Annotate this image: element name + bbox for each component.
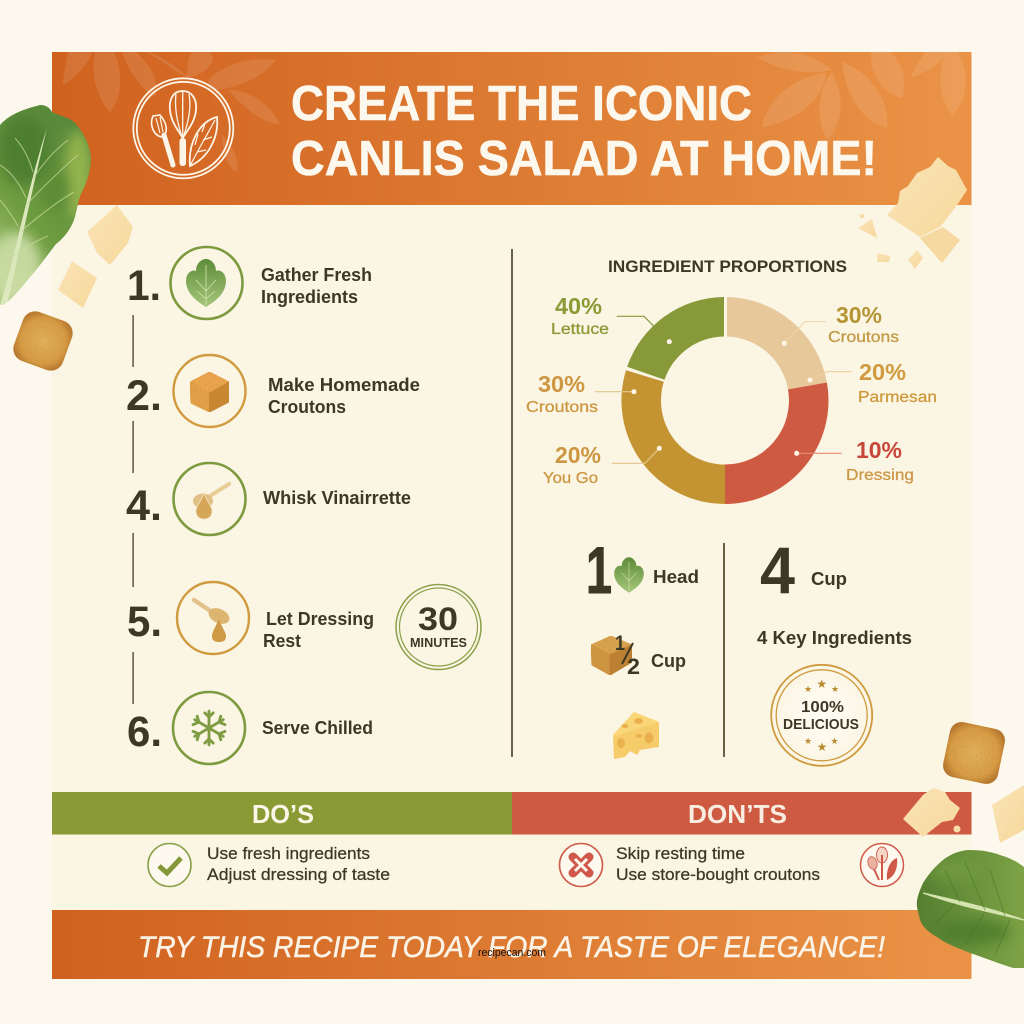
label: 20% you go: You Go [543, 470, 598, 487]
illustration: parmesan pieces left [58, 205, 133, 308]
label: 40% lettuce: 40% [555, 293, 602, 319]
text: do's list [207, 845, 390, 884]
illustration: parmesan top right [858, 157, 967, 269]
stat: 4 cup [760, 533, 847, 607]
badge: 100% delicious: DELICIOUS [783, 716, 859, 733]
label: 30% croutons left: 30% [538, 371, 585, 397]
title: CREATE THE ICONIC [291, 77, 752, 131]
step 4: let dressing rest [127, 582, 374, 654]
icon: whisk, fork and leaf emblem [133, 78, 233, 178]
heading: ingredient proportions: INGREDIENT PROPORTIONS [608, 257, 847, 276]
badge: 30 minutes [396, 584, 481, 670]
vertical divider: stats [723, 543, 725, 757]
title: CANLIS SALAD AT HOME! [291, 132, 877, 186]
step 5: serve chilled [127, 692, 373, 764]
label: 40% lettuce [551, 293, 609, 338]
text: don'ts list: Use store-bought croutons [616, 866, 820, 884]
badge: 100% delicious: ★ [816, 677, 827, 691]
illustration: parmesan bottom right [903, 785, 1024, 843]
stat: 1/2 cup: 1 [615, 632, 625, 655]
label: 20% you go [543, 442, 601, 487]
step 4: let dressing rest: Let Dressing [266, 609, 374, 629]
title [291, 77, 877, 186]
step 5: serve chilled: Serve Chilled [262, 718, 373, 738]
label: 20% parmesan: Parmesan [858, 389, 937, 406]
label: 30% croutons right: 30% [836, 302, 882, 328]
label: 20% parmesan [858, 359, 937, 406]
text: 4 key ingredients: 4 Key Ingredients [757, 628, 912, 648]
label: 20% you go: 20% [555, 442, 601, 468]
badge: 100% delicious: ★ [830, 736, 839, 746]
panel: content card [52, 205, 972, 910]
panel: do's header [52, 792, 512, 834]
panel: don'ts header: DON’TS [688, 799, 787, 829]
illustration: romaine leaf top left [0, 105, 92, 305]
illustration: crouton right [941, 720, 1007, 786]
icon: x mark [560, 844, 602, 886]
illustration: crouton left [10, 308, 76, 374]
label: 20% parmesan: 20% [859, 359, 906, 385]
step 1: gather fresh ingredients: Gather Fresh [261, 265, 372, 285]
icon: check mark [148, 844, 191, 886]
text: don'ts list [616, 845, 820, 884]
step 3: whisk vinaigrette [126, 463, 411, 535]
badge: 100% delicious: ★ [804, 684, 812, 694]
step 4: let dressing rest: 5. [127, 598, 162, 646]
text: do's list: Use fresh ingredients [207, 845, 370, 863]
label: 10% dressing: 10% [856, 437, 902, 463]
step 3: whisk vinaigrette: Whisk Vinairrette [263, 488, 411, 508]
text: don'ts list: Skip resting time [616, 845, 745, 863]
badge: 100% delicious [771, 665, 872, 766]
footer banner: TRY THIS RECIPE TODAY FOR A TASTE OF ELEGANCE! [138, 931, 886, 964]
label: 30% croutons left [526, 371, 598, 416]
stat: 1 head [586, 533, 699, 607]
stat: 1 head: Head [653, 567, 699, 587]
panel: don'ts header [512, 792, 972, 834]
label: 10% dressing [846, 437, 914, 484]
stat: 1/2 cup: Cup [651, 651, 686, 671]
icon: red utensils [860, 844, 904, 886]
step 1: gather fresh ingredients [127, 247, 372, 319]
step connector lines [132, 315, 134, 704]
icon: cheese wedge [613, 712, 659, 759]
step 2: make homemade croutons: 2. [126, 372, 162, 420]
step 4: let dressing rest: Rest [263, 631, 301, 651]
illustration: romaine leaf bottom right [917, 850, 1024, 968]
stat: 1/2 cup: 2 [627, 654, 640, 679]
badge: 30 minutes: MINUTES [410, 635, 467, 650]
stat: 1/2 cup [591, 632, 686, 679]
panel: header banner [52, 52, 972, 205]
footer banner [52, 910, 972, 979]
watermark: recipecan.com [478, 947, 546, 959]
vertical divider: center [511, 249, 513, 757]
step 3: whisk vinaigrette: 4. [126, 482, 162, 530]
badge: 100% delicious: 100% [801, 699, 844, 716]
label: 40% lettuce: Lettuce [551, 321, 609, 338]
label: 30% croutons left: Croutons [526, 399, 598, 416]
badge: 30 minutes: 30 [418, 601, 458, 637]
stat: 4 cup: 4 [760, 533, 795, 607]
label: 30% croutons right [828, 302, 899, 346]
badge: 100% delicious: ★ [817, 740, 827, 754]
step 2: make homemade croutons [126, 355, 420, 427]
step 2: make homemade croutons: Make Homemade [268, 375, 420, 395]
stat: 1 head: 1 [586, 533, 612, 607]
step 5: serve chilled: 6. [127, 708, 162, 756]
badge: 100% delicious: ★ [804, 736, 812, 746]
donut chart [595, 297, 852, 504]
step 1: gather fresh ingredients: 1. [127, 262, 161, 310]
step 1: gather fresh ingredients: Ingredients [261, 287, 358, 307]
stat: 4 cup: Cup [811, 569, 847, 589]
panel: do's header: DO’S [252, 799, 314, 829]
label: 30% croutons right: Croutons [828, 329, 899, 346]
label: 10% dressing: Dressing [846, 467, 914, 484]
badge: 100% delicious: ★ [831, 684, 839, 694]
text: do's list: Adjust dressing of taste [207, 866, 390, 884]
step 2: make homemade croutons: Croutons [268, 397, 346, 417]
